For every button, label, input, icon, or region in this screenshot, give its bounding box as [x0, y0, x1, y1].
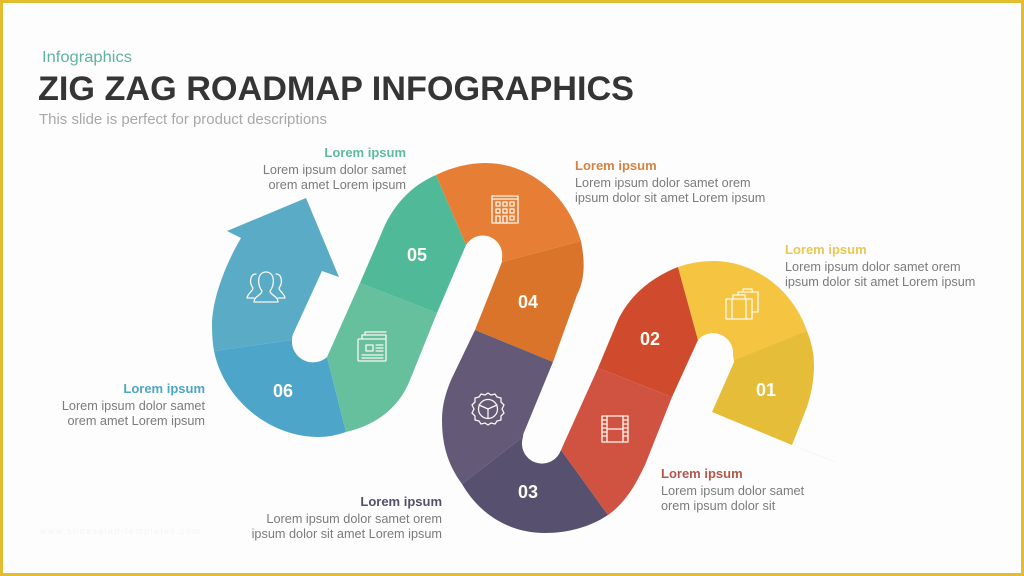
callout 03: Lorem ipsum dolor samet orem	[266, 512, 442, 526]
icon: gear and steering wheel	[472, 393, 504, 425]
segment 06	[214, 340, 346, 437]
callout 02: Lorem ipsum	[661, 466, 743, 481]
segment: building	[436, 163, 581, 262]
segment: arrow head	[212, 198, 339, 351]
callout 06: orem amet Lorem ipsum	[68, 414, 205, 428]
number 05: 05	[407, 245, 427, 265]
callout 01	[785, 242, 975, 289]
callout 01: Lorem ipsum dolor samet orem	[785, 260, 961, 274]
callout 03	[252, 494, 442, 541]
segment 01	[712, 331, 814, 445]
callout 03: ipsum dolor sit amet Lorem ipsum	[252, 527, 442, 541]
segment: news	[327, 283, 437, 432]
icon: film strip	[602, 416, 628, 442]
number 03: 03	[518, 482, 538, 502]
segment 03	[462, 437, 608, 533]
faint shadow line	[792, 445, 835, 462]
callout 06: Lorem ipsum	[123, 381, 205, 396]
title: ZIG ZAG ROADMAP INFOGRAPHICS	[38, 70, 634, 108]
callout 04	[575, 158, 765, 205]
segment: film	[561, 368, 672, 515]
callout 05: orem amet Lorem ipsum	[268, 178, 406, 192]
icon: building	[492, 196, 518, 223]
callout 04: Lorem ipsum	[575, 158, 657, 173]
callout 05: Lorem ipsum	[324, 145, 406, 160]
icon: people	[247, 272, 285, 302]
callout 06	[62, 381, 205, 428]
callout 03: Lorem ipsum	[360, 494, 442, 509]
callout 01: ipsum dolor sit amet Lorem ipsum	[785, 275, 975, 289]
callout 02	[661, 466, 805, 513]
number 04: 04	[518, 292, 538, 312]
subtitle: This slide is perfect for product descriptions	[39, 111, 327, 128]
icon: newspaper	[358, 332, 386, 361]
callout 02: Lorem ipsum dolor samet	[661, 484, 805, 498]
callout 02: orem ipsum dolor sit	[661, 499, 776, 513]
callout 04: ipsum dolor sit amet Lorem ipsum	[575, 191, 765, 205]
callout 01: Lorem ipsum	[785, 242, 867, 257]
callout 05: Lorem ipsum dolor samet	[263, 163, 406, 177]
number 02: 02	[640, 329, 660, 349]
callout 05	[263, 145, 406, 192]
callout 06: Lorem ipsum dolor samet	[62, 399, 205, 413]
number 01: 01	[756, 380, 776, 400]
segment 05	[360, 175, 466, 313]
segment 02	[598, 267, 698, 397]
watermark: www.slidesalad-templates.com	[39, 526, 200, 536]
zig zag road diagram	[212, 163, 814, 533]
segment: gear	[442, 330, 553, 484]
section label: Infographics	[42, 49, 132, 66]
callout 04: Lorem ipsum dolor samet orem	[575, 176, 751, 190]
number 06: 06	[273, 381, 293, 401]
icon: suitcases	[726, 289, 758, 319]
segment: suitcase	[678, 261, 807, 367]
segment 04	[475, 241, 584, 362]
